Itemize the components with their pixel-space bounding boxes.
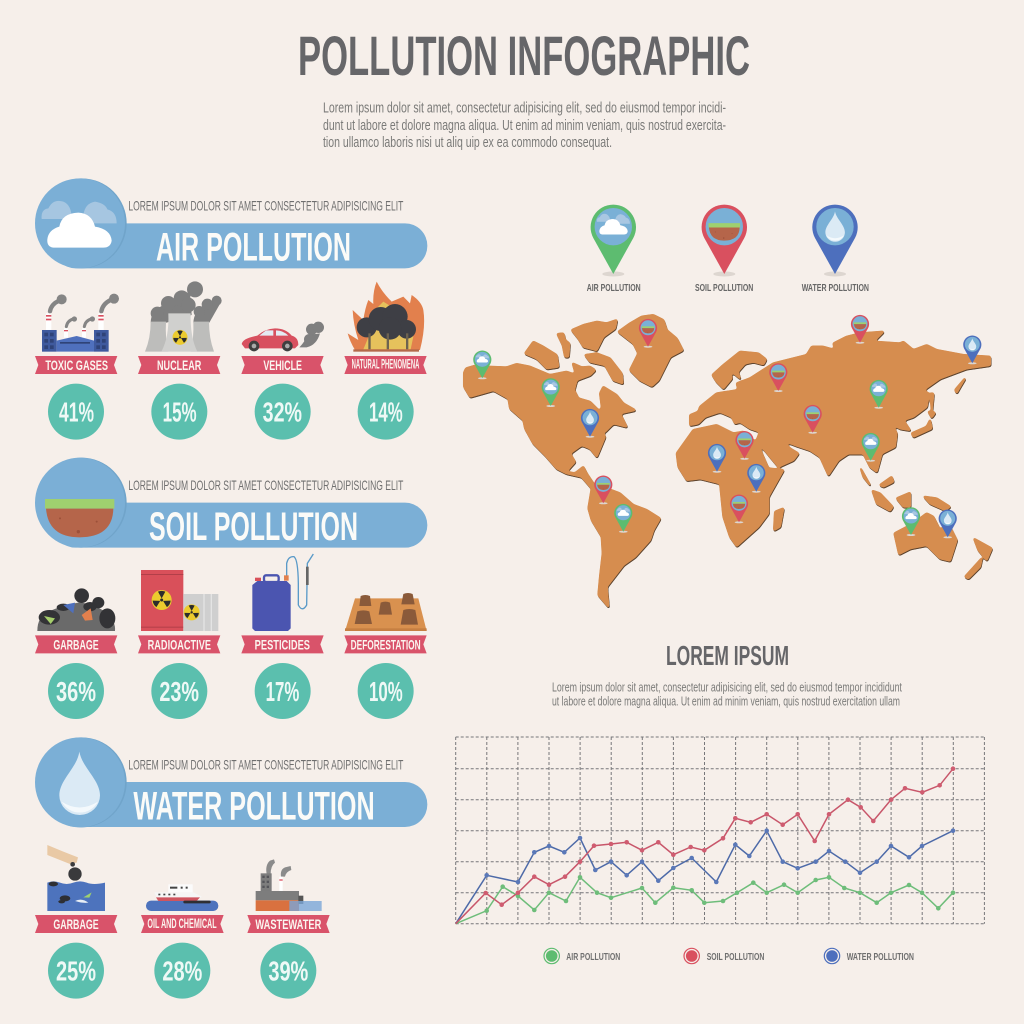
legend item: soil pollution: SOIL POLLUTION xyxy=(707,951,764,963)
stat: 28%: 28% xyxy=(162,956,202,987)
stat: 36%: 36% xyxy=(56,676,96,707)
map location pins xyxy=(473,315,981,538)
chart heading: LOREM IPSUM xyxy=(666,640,789,671)
stat: 32% xyxy=(255,384,311,440)
map legend pins xyxy=(587,205,869,294)
ribbon: vehicle xyxy=(241,356,324,374)
panel: soil pollution xyxy=(35,458,427,719)
intro text block xyxy=(323,100,726,151)
icon: natural phenomena fire xyxy=(348,282,424,352)
world map xyxy=(464,315,992,607)
intro text block: dunt ut labore et dolore magna aliqua. Ut enim ad minim veniam, quis nostrud exercita- xyxy=(323,117,726,134)
stat: 17%: 17% xyxy=(266,676,299,707)
stat: 39%: 39% xyxy=(268,956,308,987)
legend item: soil pollution xyxy=(684,948,764,964)
heading: soil pollution: LOREM IPSUM DOLOR SIT AMET CONSECTETUR ADIPISICING ELIT xyxy=(128,478,404,493)
legend item: air pollution: AIR POLLUTION xyxy=(566,951,620,963)
chart legend xyxy=(544,948,914,964)
title: POLLUTION INFOGRAPHIC xyxy=(298,24,750,87)
ribbon: garbage: GARBAGE xyxy=(53,637,99,652)
icon: radioactive barrels xyxy=(141,570,218,631)
legend item: water pollution xyxy=(824,948,914,964)
legend: air pollution pin xyxy=(587,205,641,294)
icon: wastewater plant xyxy=(256,859,322,911)
ribbon: vehicle: VEHICLE xyxy=(263,358,302,373)
series: air pollution xyxy=(456,875,955,924)
stat: 39% xyxy=(260,943,316,999)
stat: 23% xyxy=(151,663,207,719)
ribbon: wastewater xyxy=(247,915,330,933)
ribbon: pesticides xyxy=(241,635,324,653)
chart description xyxy=(552,681,902,709)
icon: nuclear plant xyxy=(145,281,222,352)
legend: soil pollution pin xyxy=(695,205,753,294)
panel: air pollution xyxy=(35,178,427,440)
ribbon: nuclear xyxy=(138,356,220,374)
panel: water pollution xyxy=(35,737,427,999)
icon: garbage pile xyxy=(37,588,115,631)
stat: 25% xyxy=(48,943,104,999)
ribbon: garbage: GARBAGE xyxy=(53,917,99,932)
ribbon: toxic gases xyxy=(35,356,117,374)
ribbon: garbage xyxy=(35,915,117,933)
stat: 23%: 23% xyxy=(159,676,199,707)
stat: 17% xyxy=(255,663,311,719)
icon: pesticide sprayer xyxy=(252,554,313,631)
series: soil pollution xyxy=(456,766,955,924)
heading: soil pollution xyxy=(35,458,427,549)
ribbon: wastewater: WASTEWATER xyxy=(255,917,321,932)
stat: 15%: 15% xyxy=(163,397,197,428)
heading: water pollution: LOREM IPSUM DOLOR SIT AMET CONSECTETUR ADIPISICING ELIT xyxy=(128,758,404,773)
stat: 15% xyxy=(151,384,207,440)
stat: 10% xyxy=(358,663,414,719)
icon: oil ship xyxy=(146,884,218,911)
ribbon: radioactive xyxy=(138,635,220,653)
heading: air pollution xyxy=(35,178,427,270)
ribbon: garbage xyxy=(35,635,117,653)
icon: factory with toxic gases xyxy=(42,294,119,352)
legend: water pollution pin: WATER POLLUTION xyxy=(802,282,869,294)
stat: 10%: 10% xyxy=(369,676,403,707)
ribbon: toxic gases: TOXIC GASES xyxy=(45,358,108,373)
icon: vehicle xyxy=(242,322,324,351)
ribbon: deforestation: DEFORESTATION xyxy=(351,637,421,652)
heading: soil pollution: SOIL POLLUTION xyxy=(149,505,358,549)
stat: 14% xyxy=(358,384,414,440)
intro text block: Lorem ipsum dolor sit amet, consectetur adipisicing elit, sed do eiusmod tempor incidi- xyxy=(323,100,726,116)
stat: 41%: 41% xyxy=(59,397,94,428)
stat: 14%: 14% xyxy=(369,397,403,428)
stat: 28% xyxy=(154,943,210,999)
ribbon: natural phenomena xyxy=(344,356,427,374)
ribbon: deforestation xyxy=(344,635,427,653)
stat: 41% xyxy=(48,384,104,440)
text: NATURAL PHENOMENA xyxy=(352,357,419,372)
ribbon: nuclear: NUCLEAR xyxy=(157,358,201,373)
legend item: air pollution xyxy=(544,948,620,964)
icon: deforestation xyxy=(345,593,427,631)
ribbon: oil and chemical xyxy=(141,915,224,933)
legend: soil pollution pin: SOIL POLLUTION xyxy=(695,282,753,294)
series: water pollution xyxy=(456,828,955,924)
stat: 36% xyxy=(48,663,104,719)
legend: air pollution pin: AIR POLLUTION xyxy=(587,282,641,294)
ribbon: radioactive: RADIOACTIVE xyxy=(148,637,211,652)
line chart xyxy=(456,737,984,924)
intro text block: tion ullamco laboris nisi ut aliq uip ex ea commodo consequat. xyxy=(323,134,612,151)
legend item: water pollution: WATER POLLUTION xyxy=(847,951,914,963)
legend: water pollution pin xyxy=(802,205,869,294)
stat: 25%: 25% xyxy=(56,956,96,987)
heading: air pollution: AIR POLLUTION xyxy=(156,226,351,270)
heading: air pollution: LOREM IPSUM DOLOR SIT AMET CONSECTETUR ADIPISICING ELIT xyxy=(128,199,404,214)
stat: 32%: 32% xyxy=(263,397,302,428)
heading: water pollution xyxy=(35,737,427,828)
heading: water pollution: WATER POLLUTION xyxy=(133,784,375,828)
ribbon: pesticides: PESTICIDES xyxy=(255,637,310,652)
icon: garbage in water xyxy=(47,845,105,911)
ribbon: oil and chemical: OIL AND CHEMICAL xyxy=(147,916,217,931)
